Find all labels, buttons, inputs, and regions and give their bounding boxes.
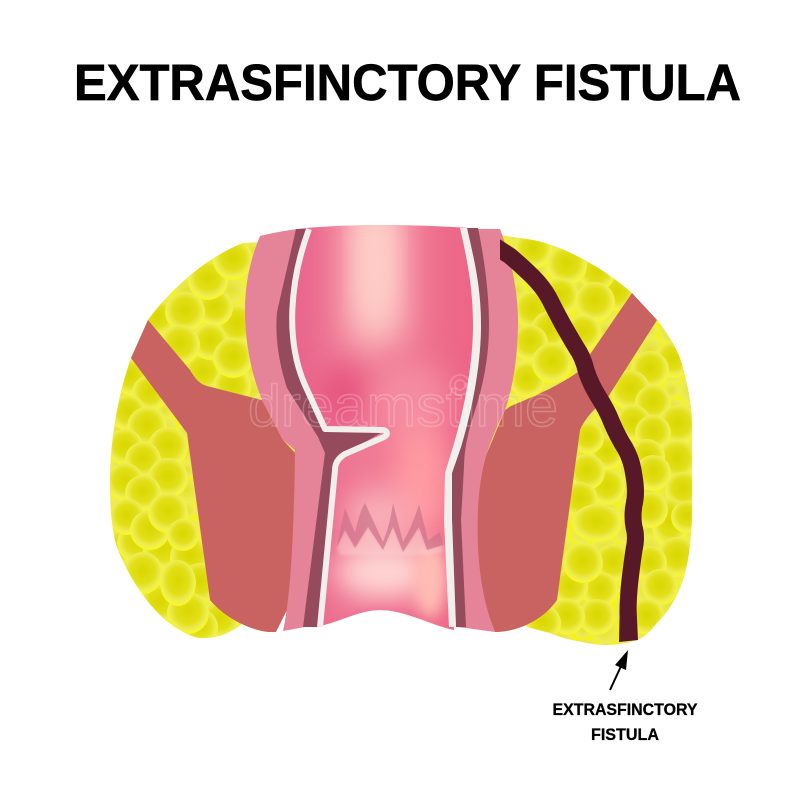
left fat tissue <box>110 242 295 638</box>
anatomy diagram <box>100 205 703 650</box>
watermark: dreamstime <box>248 374 558 439</box>
pectinate line <box>337 503 443 556</box>
label: FISTULA <box>591 725 659 744</box>
right muscular wall band <box>452 228 489 627</box>
right fat tissue <box>486 235 692 645</box>
label: EXTRASFINCTORY <box>552 700 698 719</box>
title: EXTRASFINCTORY FISTULA <box>74 54 741 111</box>
label <box>552 700 698 744</box>
right muscle <box>477 293 657 632</box>
arrow <box>610 650 628 690</box>
highlights <box>350 205 402 345</box>
right mucosa white line <box>444 228 481 627</box>
left muscular wall band <box>276 229 384 627</box>
left muscle <box>131 320 297 632</box>
rectal wall outer layer <box>245 228 518 632</box>
extrasphincteric fistula tract <box>490 243 638 642</box>
left mucosa white line with tongue <box>292 229 387 627</box>
lumen <box>295 225 473 630</box>
